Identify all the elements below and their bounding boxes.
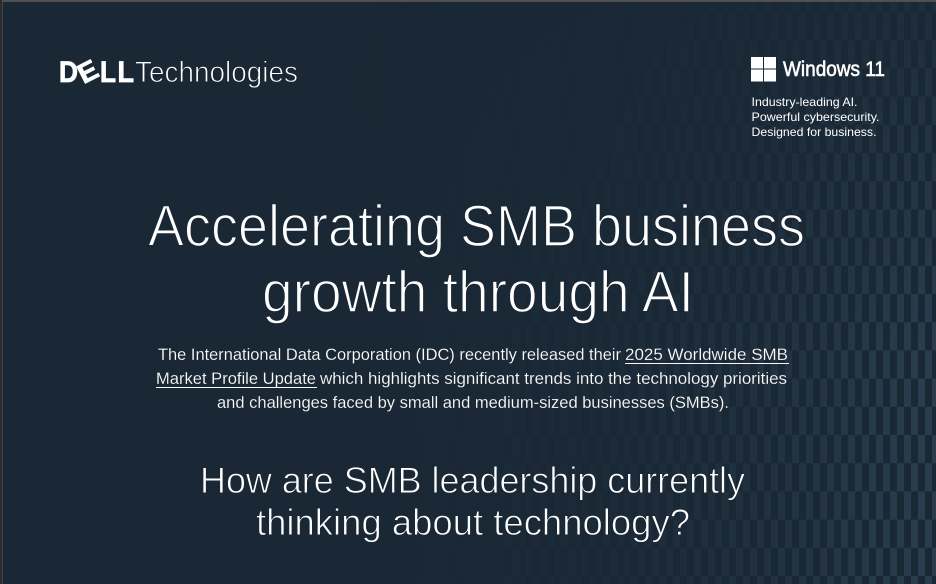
subheading: How are SMB leadership currently [200,459,745,501]
Windows tagline: Powerful cybersecurity. [752,110,880,124]
title: growth through AI [262,260,694,325]
Dell Technologies logo: E [72,53,103,90]
Windows 11 logo [751,57,885,82]
Windows tagline [752,95,880,139]
intro paragraph: and challenges faced by small and medium-sized businesses (SMBs). [217,394,729,412]
Dell Technologies logo: D [59,56,78,89]
Dell Technologies logo: L [118,56,134,89]
Windows tagline: Designed for business. [752,125,876,139]
icon: Windows squares [751,57,776,82]
intro paragraph: 2025 Worldwide SMB [625,346,788,364]
subheading [200,459,745,543]
title [148,194,805,325]
Dell Technologies logo [59,53,298,90]
title: Accelerating SMB business [148,194,805,259]
intro paragraph: which highlights significant trends into the technology priorities [319,370,787,388]
Windows 11 wordmark: Windows 11 [783,57,885,81]
intro paragraph: The International Data Corporation (IDC) recently released their [158,346,621,364]
Windows tagline: Industry-leading AI. [752,95,858,109]
Dell Technologies logo: L [100,56,116,89]
intro paragraph [156,346,789,412]
subheading: thinking about technology? [256,501,690,543]
Dell Technologies logo: Technologies [135,56,298,89]
intro paragraph: Market Profile Update [156,370,316,388]
